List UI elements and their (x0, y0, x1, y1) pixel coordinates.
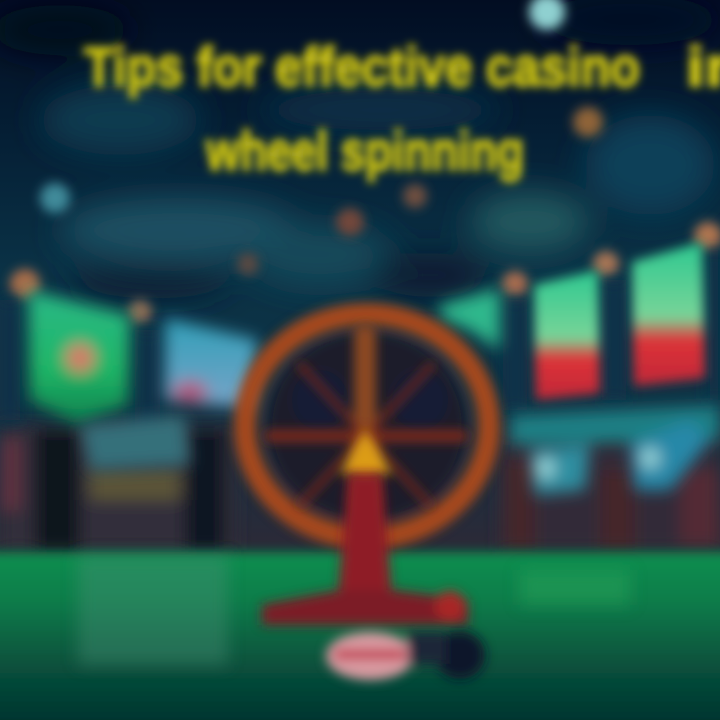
chips at the base (326, 631, 485, 680)
floor reflection (78, 555, 630, 665)
wheel spokes (270, 335, 462, 520)
background: glowing teal haze and dark patches (0, 0, 720, 298)
wheel hub (340, 428, 392, 474)
wheel (245, 314, 489, 538)
banner: right middle (534, 270, 600, 400)
wheel rim (245, 314, 489, 538)
title: Tips for effective casino (84, 35, 640, 98)
banner: left blue (165, 318, 258, 408)
pillars (0, 250, 720, 430)
crowd and lower wall (0, 425, 720, 550)
lower right panels (510, 405, 720, 495)
wheel stand (262, 474, 468, 625)
decorative lights (10, 0, 720, 324)
banner: right green small (440, 288, 500, 350)
floor (0, 552, 720, 720)
banner: left green (28, 290, 130, 424)
lower left panel (80, 415, 190, 470)
banner: right tall (632, 242, 705, 386)
title (84, 35, 720, 182)
title: wheel spinning (205, 119, 524, 182)
